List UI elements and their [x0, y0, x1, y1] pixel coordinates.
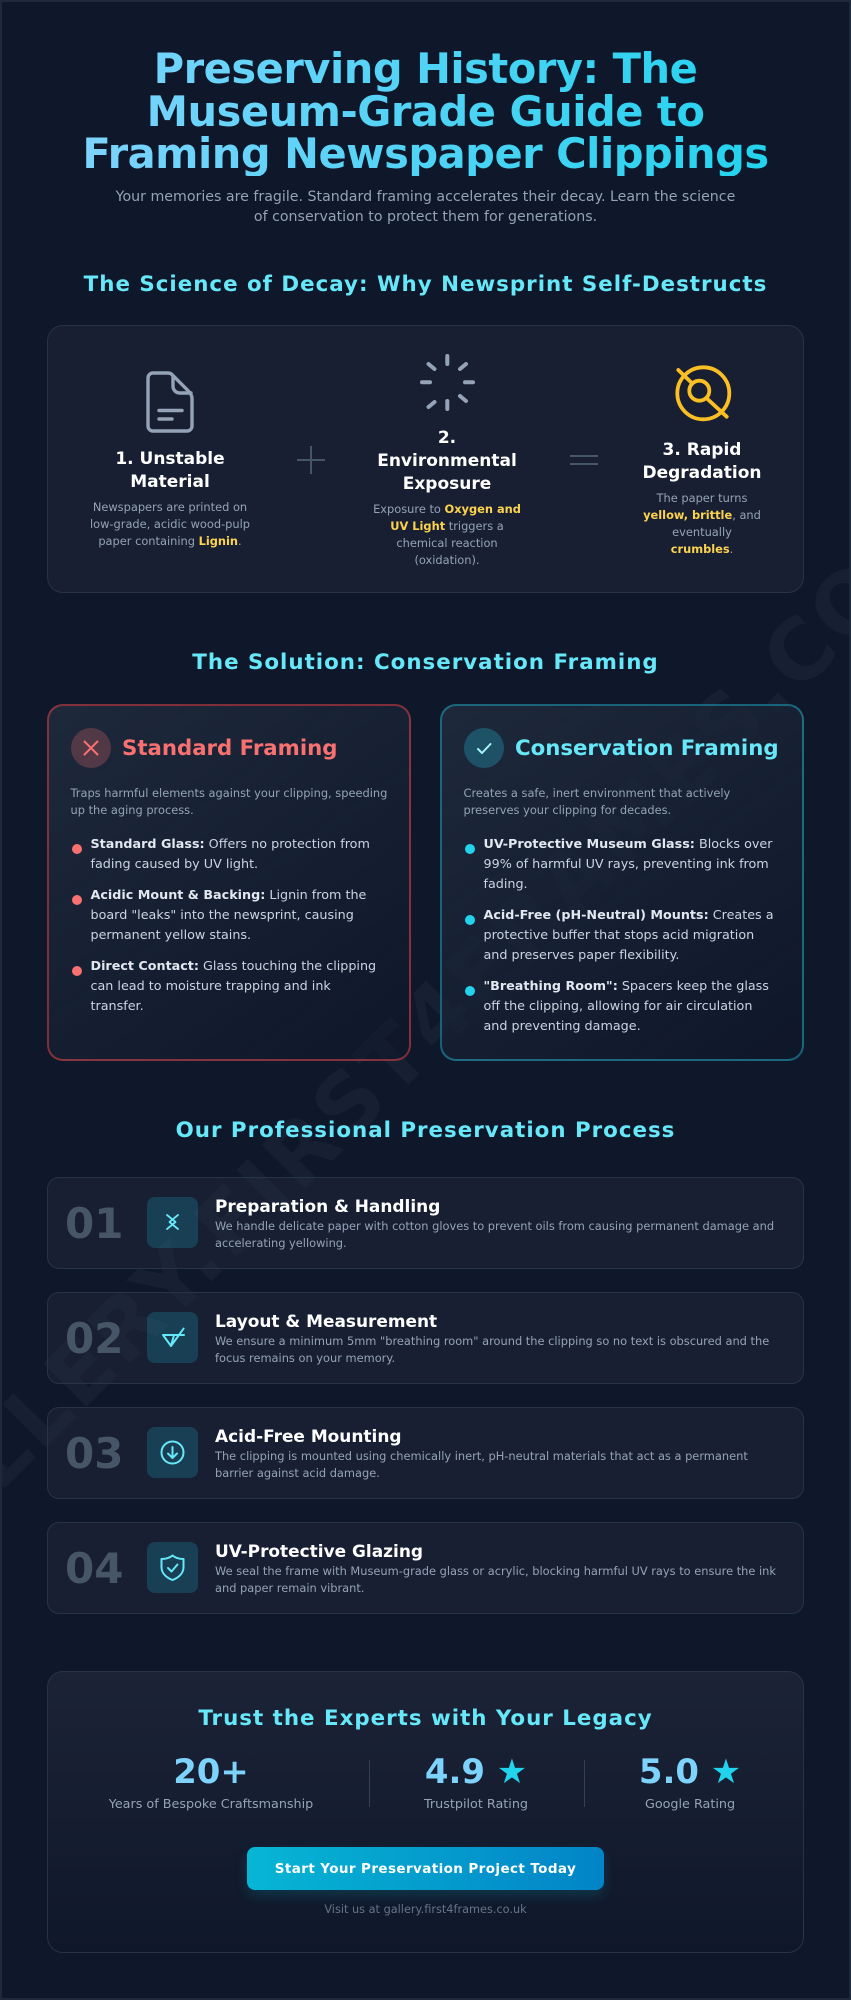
title: Museum-Grade Guide to — [147, 87, 704, 136]
icon: download circle — [147, 1427, 198, 1478]
list item: direct contact: Direct Contact: Glass touching the clipping — [90, 959, 376, 974]
stat: years: 20+ — [173, 1752, 249, 1791]
text: preparation: accelerating yellowing. — [215, 1236, 347, 1250]
subtitle: of conservation to protect them for generations. — [254, 209, 597, 225]
text: standard framing intro — [70, 786, 387, 817]
stat: trustpilot — [424, 1752, 528, 1812]
panel: call to action — [47, 1671, 804, 1953]
icon: shield — [147, 1542, 198, 1593]
number 01: 01 — [65, 1199, 123, 1248]
step 04 — [47, 1522, 804, 1614]
list item: acid-free mounts: Acid-Free (pH-Neutral) Mounts: Creates a — [484, 908, 774, 923]
text: mounting: The clipping is mounted using chemically inert, pH-neutral materials that act as a permanent — [215, 1449, 748, 1463]
stat: trustpilot: Trustpilot Rating — [424, 1797, 528, 1812]
heading: rapid degradation: 3. Rapid — [663, 440, 741, 460]
text: layout: We ensure a minimum 5mm "breathing room" around the clipping so no text is obscured and the — [215, 1334, 769, 1348]
list item: breathing room: off the clipping, allowing for air circulation — [484, 999, 752, 1014]
number 02: 02 — [65, 1314, 123, 1363]
list item: standard glass: Standard Glass: Offers no protection from — [90, 837, 370, 852]
text: rapid degradation — [643, 490, 761, 556]
text: layout: focus remains on your memory. — [215, 1351, 395, 1365]
list item: acidic mount: permanent yellow stains. — [90, 928, 251, 943]
icon: check badge — [464, 728, 504, 768]
title: Preserving History: The — [154, 44, 697, 93]
list item: acid-free mounts — [465, 908, 774, 963]
text: environmental exposure: (oxidation). — [414, 552, 480, 566]
list item: direct contact — [72, 959, 376, 1014]
heading: preservation process: Our Professional Preservation Process — [176, 1118, 675, 1143]
heading: environmental exposure: Exposure — [403, 474, 491, 494]
subtitle: Your memories are fragile. Standard framing accelerates their decay. Learn the science — [116, 188, 735, 204]
text: layout — [215, 1334, 769, 1365]
heading: trust the experts: Trust the Experts with Your Legacy — [198, 1706, 653, 1731]
list item: standard glass — [72, 837, 370, 872]
text: rapid degradation: yellow, brittle, and — [643, 508, 761, 522]
text: unstable material: low-grade, acidic wood-pulp — [90, 516, 250, 530]
list item: direct contact: can lead to moisture trapping and ink — [90, 979, 331, 994]
heading: unstable material — [115, 448, 225, 492]
text: rapid degradation: eventually — [672, 524, 732, 538]
heading: standard framing: Standard Framing — [122, 736, 337, 761]
stat: years — [108, 1752, 313, 1812]
icon: layout check — [147, 1312, 198, 1363]
icon: equals operator — [570, 455, 598, 465]
text: mounting: barrier against acid damage. — [215, 1466, 380, 1480]
text: conservation framing intro: Creates a safe, inert environment that actively — [464, 786, 730, 800]
text: preparation: We handle delicate paper with cotton gloves to prevent oils from causing permanent damage and — [215, 1219, 774, 1233]
text: conservation framing intro: preserves your clipping for decades. — [464, 803, 671, 817]
list item: breathing room: "Breathing Room": Spacers keep the glass — [484, 979, 769, 994]
text: unstable material: paper containing Lignin. — [98, 534, 242, 548]
heading: rapid degradation: Degradation — [642, 462, 762, 482]
panel: science of decay — [47, 325, 804, 593]
title: Framing Newspaper Clippings — [82, 129, 769, 178]
list item: acid-free mounts: and preserves paper flexibility. — [484, 948, 679, 963]
text: rapid degradation: crumbles. — [671, 542, 733, 556]
list item: acidic mount — [72, 888, 366, 943]
step 03 — [47, 1407, 804, 1499]
heading: rapid degradation — [642, 440, 762, 482]
icon: document — [146, 371, 194, 433]
list item: standard glass: fading caused by UV light. — [90, 857, 258, 872]
button: start project: Start Your Preservation Project Today — [275, 1861, 576, 1877]
heading: glazing: UV-Protective Glazing — [215, 1541, 423, 1561]
heading: environmental exposure — [377, 428, 517, 494]
button: start project — [247, 1847, 604, 1890]
subtitle — [116, 188, 735, 225]
list item: museum glass: UV-Protective Museum Glass: Blocks over — [484, 837, 772, 852]
stat: google — [639, 1752, 741, 1812]
heading: preparation: Preparation & Handling — [215, 1196, 440, 1216]
icon: radiating exposure — [420, 354, 475, 411]
list item: museum glass — [465, 837, 772, 892]
title — [82, 44, 769, 178]
heading: science of decay: The Science of Decay: Why Newsprint Self-Destructs — [84, 272, 767, 296]
list item: museum glass: 99% of harmful UV rays, preventing ink from — [484, 857, 769, 872]
heading: unstable material: Material — [130, 472, 210, 492]
list item: breathing room — [465, 979, 769, 1034]
text: environmental exposure: chemical reaction — [396, 536, 498, 550]
text: rapid degradation: The paper turns — [657, 490, 747, 504]
text: environmental exposure: Exposure to Oxygen and — [373, 502, 521, 516]
text: environmental exposure: UV Light triggers a — [390, 518, 504, 532]
stat: google: Google Rating — [645, 1797, 735, 1812]
heading: conservation framing: Conservation Framing — [515, 736, 779, 761]
text: preparation — [215, 1219, 774, 1250]
heading: environmental exposure: 2. — [438, 428, 456, 448]
icon: cross badge — [70, 728, 110, 768]
text: unstable material — [90, 500, 250, 548]
text: unstable material: Newspapers are printed on — [93, 500, 247, 514]
text: standard framing intro: up the aging process. — [70, 803, 194, 817]
icon: gloves — [147, 1197, 198, 1248]
column: environmental exposure — [373, 354, 521, 566]
heading: layout: Layout & Measurement — [215, 1311, 437, 1331]
heading: conservation framing: The Solution: Conservation Framing — [192, 650, 659, 675]
stat: years: Years of Bespoke Craftsmanship — [109, 1797, 313, 1812]
text: conservation framing intro — [464, 786, 730, 817]
text: website: Visit us at gallery.first4frames.co.uk — [324, 1903, 527, 1916]
text: glazing: We seal the frame with Museum-grade glass or acrylic, blocking harmful UV rays to ensure the ink — [215, 1564, 776, 1578]
list item: acidic mount: board "leaks" into the newsprint, causing — [90, 908, 354, 923]
list item: direct contact: transfer. — [90, 999, 144, 1014]
column: rapid degradation — [642, 365, 762, 556]
list item: acidic mount: Acidic Mount & Backing: Lignin from the — [90, 888, 366, 903]
number 04: 04 — [65, 1544, 123, 1593]
text: glazing — [215, 1564, 776, 1595]
icon: degradation — [675, 365, 732, 422]
heading: environmental exposure: Environmental — [377, 450, 517, 470]
number 03: 03 — [65, 1429, 123, 1478]
column: unstable material — [90, 371, 250, 548]
list item: museum glass: fading. — [484, 877, 528, 892]
text: environmental exposure — [373, 502, 521, 566]
heading: unstable material: 1. Unstable — [115, 448, 225, 468]
panel: conservation framing — [440, 704, 804, 1061]
stat: trustpilot: 4.9 ★ — [425, 1752, 527, 1791]
text: standard framing intro: Traps harmful elements against your clipping, speeding — [70, 786, 387, 800]
text: glazing: and paper remain vibrant. — [215, 1581, 364, 1595]
list item: acid-free mounts: protective buffer that stops acid migration — [484, 928, 754, 943]
heading: mounting: Acid-Free Mounting — [215, 1426, 402, 1446]
panel: standard framing — [47, 704, 411, 1061]
step 02 — [47, 1292, 804, 1384]
list item: breathing room: and preventing damage. — [484, 1019, 641, 1034]
icon: plus operator — [297, 446, 325, 474]
text: mounting — [214, 1449, 748, 1480]
step 01 — [47, 1177, 804, 1269]
stat: google: 5.0 ★ — [639, 1752, 741, 1791]
